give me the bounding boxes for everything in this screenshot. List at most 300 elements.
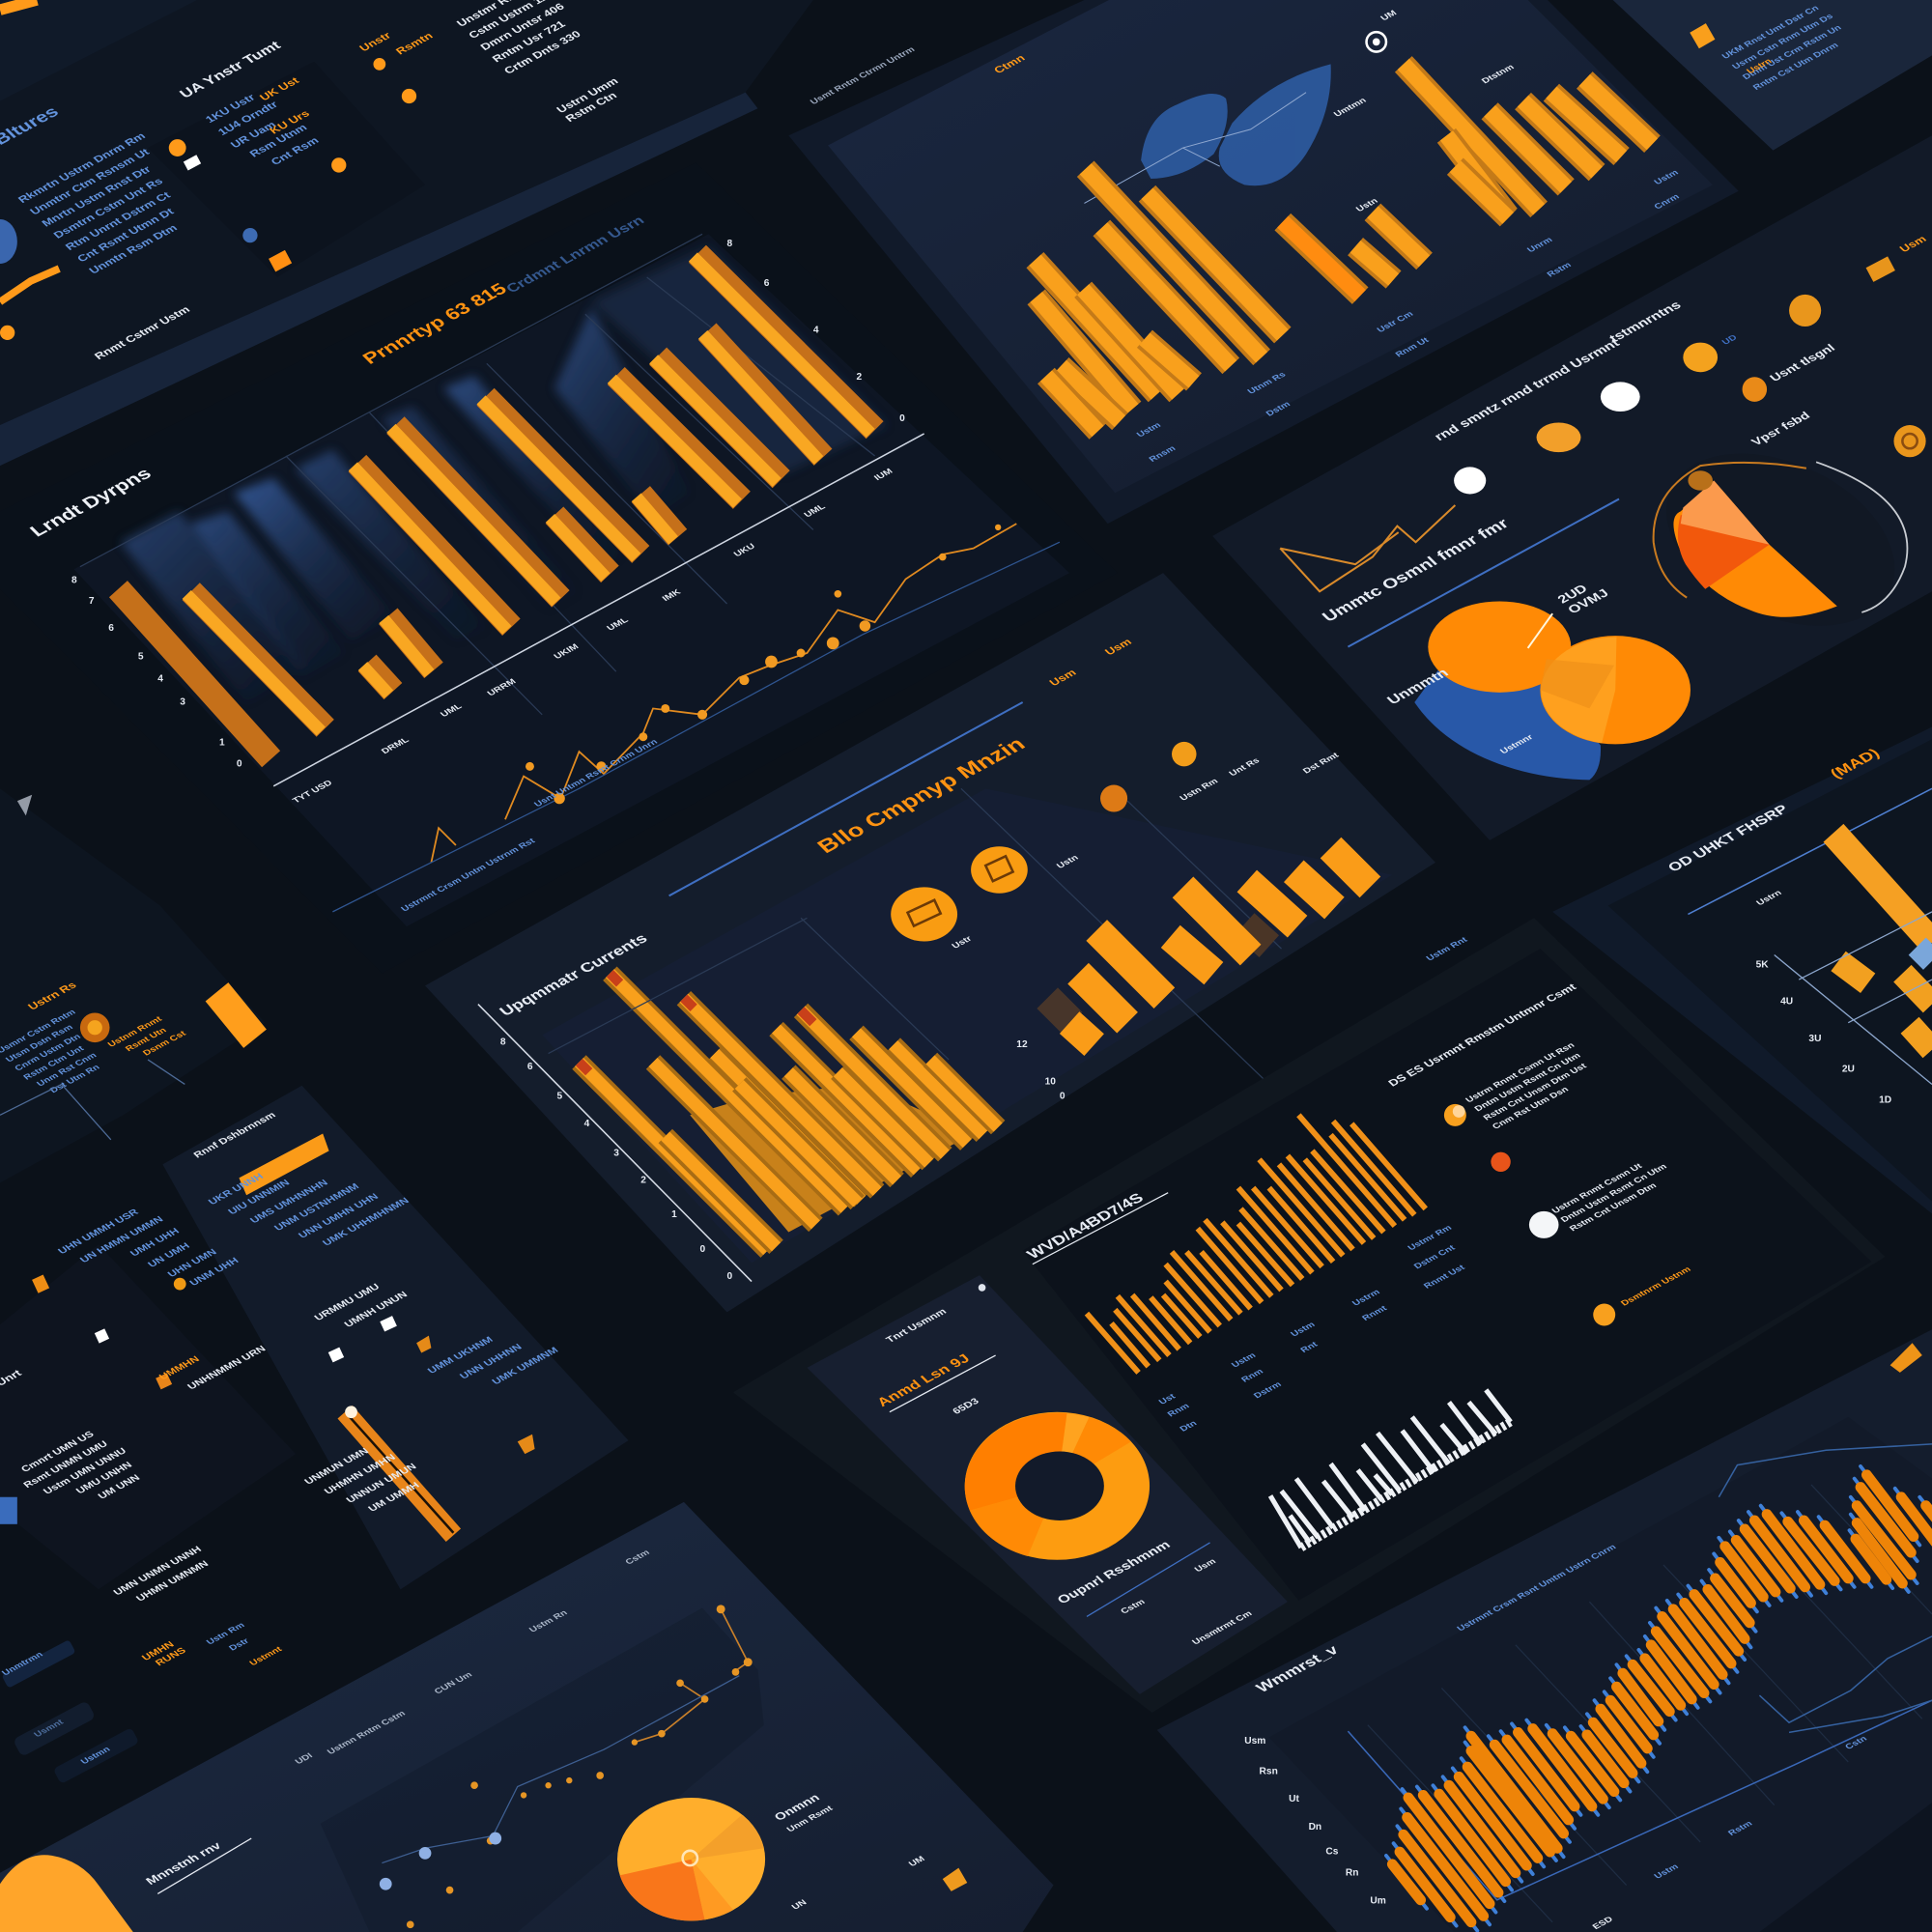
text: axis numbers: 0	[727, 1271, 733, 1282]
heading: title: Mnnstnh rnv	[143, 1839, 224, 1887]
chart: thin axes	[0, 1060, 185, 1140]
chart: bar shadows	[118, 254, 875, 759]
text: rows: Cnrm Ustm Dtn	[13, 1033, 83, 1073]
text: chart labels: Umtmn	[1332, 96, 1369, 119]
panel: pies	[1212, 135, 1932, 840]
chart background: blue bands	[121, 246, 887, 702]
icon: globe badge	[1367, 32, 1386, 52]
text: axis labels: 4U	[1780, 997, 1793, 1008]
text: y axis numbers: 8	[727, 239, 733, 249]
panel: table left	[0, 1189, 296, 1671]
text: axis labels: Rnmt Ust	[1422, 1263, 1468, 1291]
text: rows top: UNM UHH	[187, 1256, 242, 1288]
text: chart notes: Dst Rmt	[1301, 751, 1342, 776]
text: chart notes: Ustm Rnt	[1424, 935, 1470, 963]
text: right rows: Dsnm Cst	[141, 1029, 189, 1058]
text: top labels	[293, 1548, 652, 1766]
text: orange tag: UMHN	[140, 1639, 177, 1662]
text: bar-side rows: UHMHN UMHN	[323, 1453, 398, 1496]
text: axis numbers: 5	[557, 1092, 563, 1102]
text: top labels: Ustm Rn	[527, 1608, 570, 1634]
text: axis labels: Cs	[1325, 1847, 1339, 1858]
text: pie legend: Onmnn	[771, 1791, 822, 1823]
text block: table: UKM Rnst Umt Dstr Cn	[1720, 4, 1822, 61]
text block: status rows: 1U4 Orndtr	[215, 99, 281, 138]
text block: status rows: 1KU Ustr	[203, 92, 258, 125]
text: axis numbers: 8	[500, 1037, 506, 1048]
text block: table: Rntm Cst Utm Dnrm	[1751, 41, 1840, 92]
text: axis labels: 2U	[1842, 1065, 1855, 1075]
text: donut caption: Oupnrl Rsshmnm	[1055, 1539, 1174, 1606]
text: axis labels	[291, 467, 895, 806]
text: bottom rows: Rsmt UNMN UMU	[21, 1439, 110, 1490]
text: donut notes	[1119, 1557, 1254, 1647]
map: node lines	[1084, 93, 1306, 203]
chart: white baseline	[1301, 1422, 1511, 1548]
text: donut notes: Unsmtrmt Cm	[1190, 1609, 1254, 1647]
text: table rows left: UNM USTNHMNM	[272, 1181, 361, 1233]
icon: top right tag	[1890, 1343, 1922, 1373]
text: axis labels: UML	[802, 502, 828, 520]
divider: blue rule	[1348, 499, 1619, 647]
text: axis labels: Rnt	[1298, 1340, 1321, 1354]
blob: orange shape	[0, 1855, 133, 1932]
chart: bars	[1833, 833, 1932, 1050]
text: chart labels: Rstm	[1545, 261, 1574, 279]
panel: donut and bars outer	[733, 918, 1886, 1713]
text: legend rows: Ustrm Rnmt Csmn Ut Rsn	[1463, 1040, 1577, 1105]
text: y axis numbers: 4	[157, 673, 163, 684]
text: axis labels: Dstm Cnt	[1412, 1243, 1458, 1271]
text: line chart labels upper: Usnt Untmn Rsmt Crnm Unrn	[532, 737, 660, 809]
chart: orange bar	[216, 992, 255, 1038]
text: right labels: Usnt tlsgnl	[1767, 342, 1837, 384]
text: top labels: UDI	[293, 1751, 315, 1766]
text: table rows right: UMM UKHNM	[426, 1335, 496, 1376]
text: rows: Utsm Dstn Rsm	[4, 1023, 75, 1065]
text: chart notes: 12	[1016, 1039, 1028, 1050]
text block: small notes: Ustrn Umm	[554, 75, 621, 115]
text: chart labels: Usmt Rntm Ctrmn Untrm	[809, 45, 917, 106]
text: y axis numbers: 6	[108, 623, 114, 634]
text: orange rows: UMMHN	[157, 1354, 202, 1382]
legend: items	[1444, 1104, 1615, 1325]
text block: orange labels: Rsmtn	[393, 30, 436, 57]
text: axis labels: IUM	[872, 467, 895, 482]
text: rows top: UHN UMMH USR	[56, 1208, 141, 1256]
icon: orange tag	[1690, 23, 1715, 48]
text: table rows mid: URMMU UMU	[312, 1282, 383, 1322]
text: axis labels: Ust	[1157, 1392, 1179, 1406]
text: bar-side rows: UNMUN UMN	[302, 1446, 371, 1487]
text: panel header: rnd smntz rnnd trrmd Usrmnt	[1432, 337, 1623, 443]
text: chart labels: Ustm	[1652, 168, 1681, 186]
heading: pies title: Ummtc Osmnl fmnr fmr	[1319, 515, 1513, 625]
text: y axis numbers	[71, 239, 905, 769]
text: bottom rows: Cmnrt UMN US	[19, 1430, 97, 1474]
text: lower right labels: UM	[907, 1855, 927, 1868]
text: legend rows: Dntm Ustm Rsmt Cn Utm	[1472, 1051, 1583, 1114]
chart: cluster bars	[579, 974, 998, 1251]
text: axis labels: Ut	[1289, 1794, 1300, 1804]
text: y axis numbers: 6	[764, 278, 770, 289]
text: axis labels: DRML	[380, 735, 412, 756]
chart: blue lines	[1719, 1444, 1932, 1732]
text: notes: Dstr	[227, 1636, 252, 1653]
text: top labels: Ustmn Rntm Cstm	[326, 1709, 408, 1756]
text: table rows left: UNN UMHN UHN	[297, 1192, 381, 1240]
divider: caption rule	[1087, 1543, 1210, 1616]
text: legend rows: Dsmtnrm Ustnm	[1619, 1265, 1693, 1308]
text block: orange tags: KU Urs	[267, 107, 313, 136]
text: rows: Rstm Ctm Unt	[21, 1044, 87, 1082]
text: axis labels: Ustm	[1289, 1321, 1318, 1339]
chart: orange striped bar	[345, 1406, 453, 1535]
text: chart labels: Dstm	[1264, 400, 1293, 418]
divider: blue rule	[669, 702, 1023, 895]
text: right labels: Usm	[1897, 233, 1929, 254]
text: right labels: Vpsr fsbd	[1748, 410, 1813, 448]
text: legend rows	[1463, 1040, 1693, 1308]
text: button two: Usmnt	[32, 1718, 67, 1739]
heading: chart title: WVD/A4BD7/4S	[1023, 1190, 1147, 1262]
text: orange tag: RUNS	[154, 1646, 188, 1668]
text: lower right labels: UN	[790, 1898, 810, 1912]
chart: donut	[965, 1412, 1150, 1560]
text: chart notes: Ustn Rm	[1178, 777, 1220, 803]
heading: panel title blue: Crdmnt Lnrmn Usrn	[503, 213, 647, 296]
text block: top-left heading: UA Ynstr Tumt	[177, 39, 284, 101]
text: axis labels: Ustmr Rm	[1406, 1224, 1454, 1253]
text: top labels: CUN Um	[433, 1670, 474, 1696]
chart: axis	[1348, 1700, 1932, 1900]
text: chart labels: Ustn	[1354, 196, 1380, 213]
heading: legend title: DS ES Usrmnt Rmstm Untmnr Csmt	[1385, 981, 1579, 1089]
text: button three: Ustmn	[79, 1745, 113, 1766]
icon: dropdown marker	[17, 795, 32, 815]
text block: orange labels: Unstr	[356, 30, 394, 54]
text: orange label: Ustrn Rs	[25, 980, 79, 1012]
text: axis numbers: 6	[527, 1062, 533, 1072]
text: y axis numbers: 4	[813, 325, 819, 335]
divider: title rule	[890, 1355, 996, 1412]
text: axis labels: URRM	[485, 677, 519, 698]
text: legend rows: Cnm Rst Utm Dsn	[1491, 1085, 1571, 1131]
text: chart labels: Ustm	[1135, 421, 1163, 440]
chart: grid	[1368, 1485, 1932, 1922]
text: right rows: Ustnm Rnmt	[106, 1014, 165, 1049]
chart: cluster underlay	[690, 1084, 974, 1233]
text: panel header end: tstmnrntns	[1606, 298, 1685, 345]
panel: bottom-left buttons	[0, 1639, 139, 1784]
text: chart labels: Cnrm	[1652, 192, 1682, 212]
text: axis numbers: 1	[671, 1209, 677, 1220]
text: y axis numbers: 5	[138, 651, 144, 662]
text block: blue list: Unmtnr Ctm Rsnsm Ut	[27, 146, 152, 217]
icon: medal	[80, 1012, 110, 1042]
heading: table title: Rnnf Dshbrnnsm	[191, 1110, 278, 1160]
text: bottom rows: Ustm UMN UNNU	[42, 1446, 129, 1496]
text block: right column: Dmrn Untsr 406	[477, 1, 567, 52]
map: blue land	[1141, 64, 1331, 185]
text: axis labels: Rstm	[1726, 1819, 1754, 1837]
text: chart notes: Unt Rs	[1227, 756, 1262, 779]
chart: axis	[1775, 912, 1932, 1084]
text: axis labels: 3U	[1808, 1034, 1821, 1044]
text block: blue list: Cnt Rsmt Utmn Dt	[74, 206, 177, 265]
text: rows: Dst Utm Rn	[48, 1063, 102, 1095]
text: table rows left: UIU UNNMIN	[226, 1178, 292, 1217]
text: chart labels: Dtstnm	[1480, 63, 1517, 86]
text: table rows left: UMK UHHMHNMN	[321, 1196, 412, 1248]
chart: grid lines	[80, 234, 875, 715]
chart: line dots	[380, 1605, 753, 1928]
chart: big pie	[1638, 419, 1922, 660]
text: axis labels: Rsn	[1260, 1767, 1278, 1777]
text block: status rows: UR Uam	[228, 119, 278, 151]
text: subtitle: Ustrmnt Crsm Rsnt Umtm Ustrn Cnrm	[1455, 1543, 1618, 1634]
text: right labels	[1720, 233, 1929, 448]
text: pie legend: Unm Rsmt	[784, 1804, 836, 1834]
text: axis labels: Rnm	[1239, 1367, 1265, 1384]
text block: blue list: Rtm Unrnt Dstrm Ct	[63, 189, 173, 252]
text: axis labels: UKIM	[552, 642, 582, 661]
text: top tags	[1046, 636, 1134, 688]
text: blue segment label: Ustmnr	[1498, 732, 1536, 756]
text block: blue list: Dsmtrn Cstm Unt Rs	[51, 175, 166, 241]
panel: orange cluster chart	[425, 573, 1470, 1312]
chart: small line	[1280, 505, 1455, 591]
text: rows: Unm Rst Cnm	[35, 1051, 99, 1089]
text: chart labels: Rnsm	[1147, 444, 1178, 464]
chart: right bars	[1047, 848, 1370, 1045]
text: axis labels: Dstrm	[1252, 1380, 1284, 1401]
text: chart notes: Ustn	[1055, 853, 1081, 870]
text: donut panel header: Tnrt Usmnm	[884, 1307, 949, 1345]
text: y axis numbers: 0	[899, 413, 905, 424]
text: axis labels: Ustrn	[1754, 889, 1784, 907]
icon: badge one	[891, 887, 957, 941]
chart: thin orange bars	[1087, 1115, 1426, 1373]
text: chart notes: 10	[1045, 1076, 1056, 1087]
chart: grid	[549, 788, 1282, 1084]
text: bar-side rows: UNNUN UMUN	[344, 1462, 419, 1505]
text: axis labels: ESD	[1591, 1915, 1615, 1931]
text: y axis numbers: 7	[89, 596, 95, 607]
panel: table right	[162, 1086, 629, 1589]
text: button one: Unmtrmn	[0, 1650, 45, 1678]
icons: row	[1454, 256, 1926, 494]
panel: top-right table	[1613, 0, 1932, 151]
text: donut notes: Usm	[1193, 1557, 1218, 1574]
icon: header marker	[979, 1284, 985, 1292]
text block: table: Usrm Cstn Rnm Utm Ds	[1730, 12, 1835, 71]
panel: bottom-left chart	[0, 1502, 1054, 1932]
panel: wave chart	[1157, 1329, 1932, 1932]
text block: orange table tags: Ustrn	[1745, 57, 1775, 75]
heading: panel title: Bllo Cmpnyp Mnzin	[813, 734, 1031, 858]
text: chart notes: Ustr	[950, 934, 975, 951]
chart: white bars	[1270, 1390, 1511, 1548]
text: y axis numbers: 1	[219, 738, 225, 749]
icon: badge two	[971, 846, 1028, 894]
chart: orange bars	[1392, 1475, 1932, 1922]
text: bottom rows: UMU UNHN	[74, 1460, 134, 1496]
text: axis labels: Um	[1370, 1896, 1386, 1907]
icon: dot one	[1100, 784, 1127, 812]
text: top tags: Usm	[1046, 667, 1079, 688]
panel: right edge bars	[1552, 727, 1932, 1213]
text: axis labels: Ustm	[1652, 1862, 1681, 1881]
text block: status rows: Cnt Rsm	[268, 134, 322, 167]
chart: line series	[332, 524, 1060, 912]
chart: blue pie fragment	[0, 219, 17, 264]
text: axis labels: Rnmt	[1360, 1303, 1390, 1322]
text: axis labels: Usm	[1244, 1736, 1265, 1747]
heading: donut title: Anmd Lsn 9J	[874, 1351, 973, 1409]
text: bar-side rows: UM UMMH	[366, 1481, 422, 1514]
text: legend rows: Rstm Cnt Unsm Dtm Ust	[1482, 1062, 1590, 1122]
text: axis numbers: 0	[699, 1244, 705, 1255]
heading: left title: Upqmmatr Currents	[496, 930, 651, 1019]
text: axis labels: UML	[439, 702, 465, 719]
text: y axis numbers: 8	[71, 575, 77, 585]
divider: rule	[1688, 788, 1932, 914]
text: rows top: UN HMMN UMMN	[78, 1214, 165, 1264]
text: chart labels: Ustr Cm	[1375, 310, 1415, 334]
text: axis labels: Dn	[1309, 1822, 1321, 1833]
panel: left indicators	[0, 788, 265, 1182]
text: venn labels: Unmmtn	[1384, 667, 1452, 707]
text: legend rows: Rstm Cnt Unsm Dtm	[1568, 1181, 1659, 1234]
text block: blue list: Unmtn Rsm Dtm	[86, 222, 180, 276]
text: axis labels: Ustm	[1230, 1351, 1258, 1370]
text block: blue list: Rkmrtn Ustrm Dnrm Rm	[15, 130, 148, 205]
text: y axis numbers: 0	[237, 758, 242, 769]
text block: right column: Crtm Dnts 330	[501, 28, 583, 76]
text: axis labels: Dtn	[1178, 1419, 1200, 1434]
text: axis labels: 1D	[1879, 1095, 1891, 1106]
text: axis labels	[1244, 1734, 1869, 1931]
icon: dot two	[1172, 742, 1197, 766]
chart: left bars	[1035, 169, 1424, 431]
text: chart labels: Utnm Rs	[1245, 370, 1288, 396]
chart: right bars	[1404, 64, 1652, 218]
heading: panel title orange: Prnnrtyp 63 815	[359, 280, 511, 368]
text: axis labels: Rn	[1346, 1867, 1358, 1878]
heading: chart title: Wmmrst_v	[1252, 1642, 1343, 1695]
text: lower rows: UMN UNMN UNNH	[111, 1545, 204, 1598]
text: axis labels: IMK	[661, 587, 683, 603]
chart: bar highlights	[186, 257, 870, 731]
divider: title rule	[157, 1838, 251, 1893]
text: y axis numbers: 2	[856, 372, 862, 383]
text: rows top: UN UMH	[146, 1241, 192, 1269]
text: chart labels: Ctmn	[991, 52, 1028, 75]
chart: pie	[617, 1798, 765, 1921]
text: rows top: UMH UHH	[128, 1227, 182, 1259]
divider: title rule	[1033, 1193, 1168, 1264]
heading: right panel title: OD UHKT FHSRP	[1665, 803, 1792, 875]
text: legend rows: Dntm Ustm Rsmt Cn Utm	[1559, 1162, 1669, 1225]
text: venn value: OVMJ	[1565, 587, 1612, 616]
text: lower rows: UHMN UMNMN	[134, 1559, 211, 1604]
text: table rows right: UMK UMMNM	[490, 1346, 561, 1387]
text: axis labels: Ustrm	[1350, 1288, 1382, 1308]
text: chart labels	[809, 9, 1682, 464]
text: table rows right: UNN UHHNN	[458, 1342, 525, 1381]
heading: right panel orange: (MAD)	[1827, 746, 1883, 781]
panel: main bar and line chart	[0, 162, 1118, 974]
text: rows top: UHN UMN	[165, 1247, 219, 1279]
panel: top-left tables	[0, 0, 813, 466]
text: axis labels: UKU	[732, 542, 757, 558]
chart: axis	[478, 1005, 752, 1282]
text: right rows: Rsmt Utn	[124, 1026, 169, 1054]
chart: blue fringe	[1386, 1466, 1932, 1931]
text: axis labels	[1157, 1224, 1468, 1434]
text: axis labels	[1754, 889, 1891, 1106]
text: white rows: UNHNMMN URN	[185, 1344, 269, 1392]
text: chart notes	[950, 751, 1470, 1102]
text: y axis numbers: 3	[180, 697, 185, 708]
text: axis labels: UML	[605, 615, 631, 633]
text: table rows left: UMS UMHNNHN	[248, 1178, 330, 1226]
icons: status dots	[169, 58, 416, 271]
icon: orange corner	[943, 1868, 967, 1891]
text: notes: Ustn Rm	[205, 1621, 247, 1647]
text: axis numbers	[500, 1037, 733, 1282]
text: chart labels: Rnm Ut	[1394, 335, 1432, 359]
text: line chart labels: Ustrmnt Crsm Untm Ustrnm Rst	[399, 837, 538, 914]
text: axis numbers: 3	[613, 1148, 619, 1158]
text: bottom rows: UM UNN	[96, 1473, 142, 1501]
text block: footer: Rnmt Cstmr Ustm	[92, 303, 192, 361]
text block: status rows: Rsm Utnm	[246, 122, 310, 159]
text: chart labels: UM	[1378, 9, 1399, 23]
panel: donut	[807, 1275, 1288, 1694]
text: axis labels: Cstn	[1843, 1734, 1869, 1751]
text block: table: Dtnm Ust Crm Rstm Un	[1741, 23, 1844, 82]
text block: small notes: Rstm Ctn	[562, 90, 619, 124]
text: venn value: 2UD	[1555, 582, 1591, 607]
text: axis labels: Rnm	[1166, 1402, 1192, 1419]
text: donut notes: Cstm	[1119, 1598, 1148, 1616]
text: chart labels: Unrm	[1525, 236, 1555, 254]
text: top labels: Cstm	[623, 1548, 652, 1567]
text: donut value: 65D3	[951, 1397, 981, 1416]
text: axis numbers: 2	[640, 1175, 646, 1185]
text: axis labels: TYT USD	[291, 779, 335, 806]
panel: map and bars	[788, 0, 1739, 524]
text: table rows left: UKR UNNH	[207, 1172, 266, 1207]
text: right labels: UD	[1720, 333, 1740, 347]
text: legend rows: Ustrm Rnmt Csmn Ut	[1550, 1161, 1645, 1215]
heading: left title: Lrndt Dyrpns	[26, 465, 156, 540]
text: axis labels: 5K	[1756, 959, 1769, 970]
text block: right column: Rntm Usr 721	[490, 18, 568, 65]
chart: orange fragment	[0, 0, 59, 340]
chart: venn pies	[1414, 601, 1690, 780]
text: orange note: Ustmnt	[247, 1644, 285, 1667]
text: table rows mid: UMNH UNUN	[342, 1290, 410, 1329]
highlight: orange header	[239, 1133, 329, 1195]
axis: baseline	[273, 434, 924, 786]
icons: small orange	[0, 1274, 186, 1524]
text: top tags: Usm	[1102, 636, 1134, 658]
text: chart notes: 0	[1060, 1092, 1065, 1102]
icons: table markers	[328, 1316, 535, 1454]
